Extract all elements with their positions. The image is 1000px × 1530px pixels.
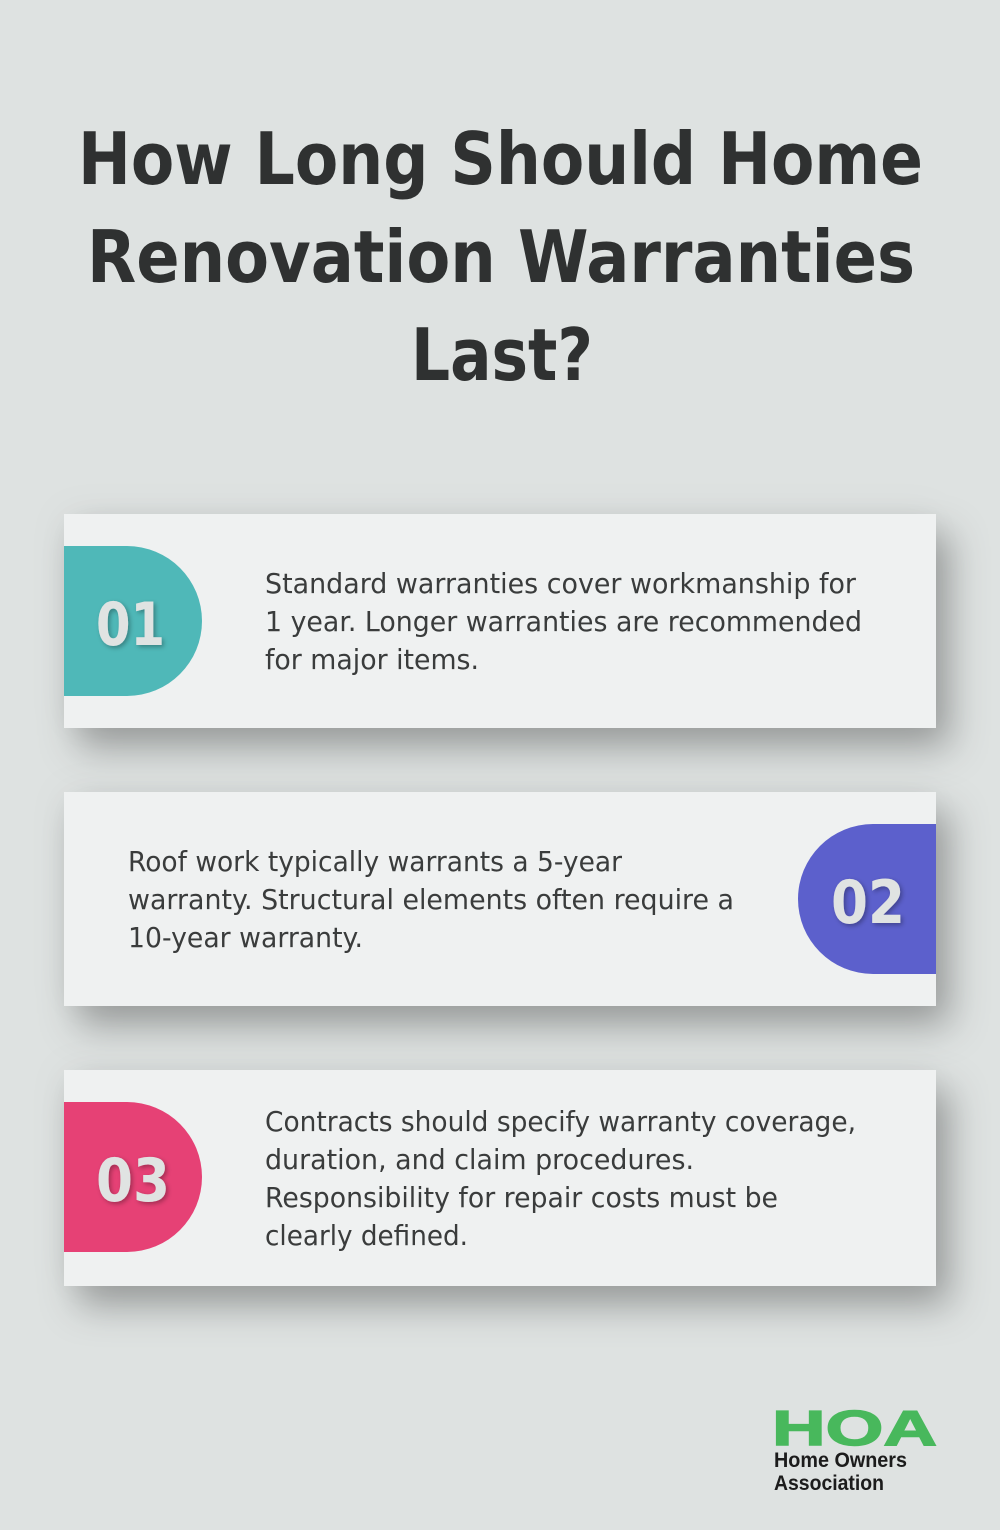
text: step 01 description <box>265 568 862 676</box>
panel: step 02 <box>64 792 936 1006</box>
text: step 03 description: clearly defined. <box>265 1220 468 1252</box>
text: step 02 description: Roof work typically warrants a 5-year <box>128 846 623 878</box>
text: step 03 description: Contracts should specify warranty coverage, <box>265 1106 856 1138</box>
title: Last? <box>411 313 593 397</box>
badge: 01: 01 <box>96 590 165 660</box>
badge: 03 <box>64 1102 202 1252</box>
panel: step 03 <box>64 1070 936 1286</box>
badge: 03: 03 <box>96 1146 170 1216</box>
logo: HOA Home Owners Association <box>772 1402 937 1495</box>
text: step 01 description: 1 year. Longer warranties are recommended <box>265 606 862 638</box>
text: step 02 description <box>128 846 734 954</box>
badge: 01 <box>64 546 202 696</box>
icon: HOA letters: HOA <box>772 1402 937 1456</box>
badge: 02 <box>798 824 936 974</box>
panel: step 01 <box>64 514 936 728</box>
text: step 03 description: Responsibility for repair costs must be <box>265 1182 778 1214</box>
logo: HOA Home Owners Association: Home Owners <box>774 1449 907 1472</box>
title <box>78 117 923 397</box>
text: step 03 description <box>265 1106 856 1252</box>
logo: HOA Home Owners Association: Association <box>774 1472 884 1495</box>
text: step 01 description: for major items. <box>265 644 479 676</box>
text: step 01 description: Standard warranties cover workmanship for <box>265 568 857 600</box>
text: step 02 description: 10-year warranty. <box>128 922 363 954</box>
title: Renovation Warranties <box>87 215 915 299</box>
text: step 02 description: warranty. Structural elements often require a <box>128 884 734 916</box>
text: step 03 description: duration, and claim procedures. <box>265 1144 694 1176</box>
badge: 02: 02 <box>831 868 905 938</box>
